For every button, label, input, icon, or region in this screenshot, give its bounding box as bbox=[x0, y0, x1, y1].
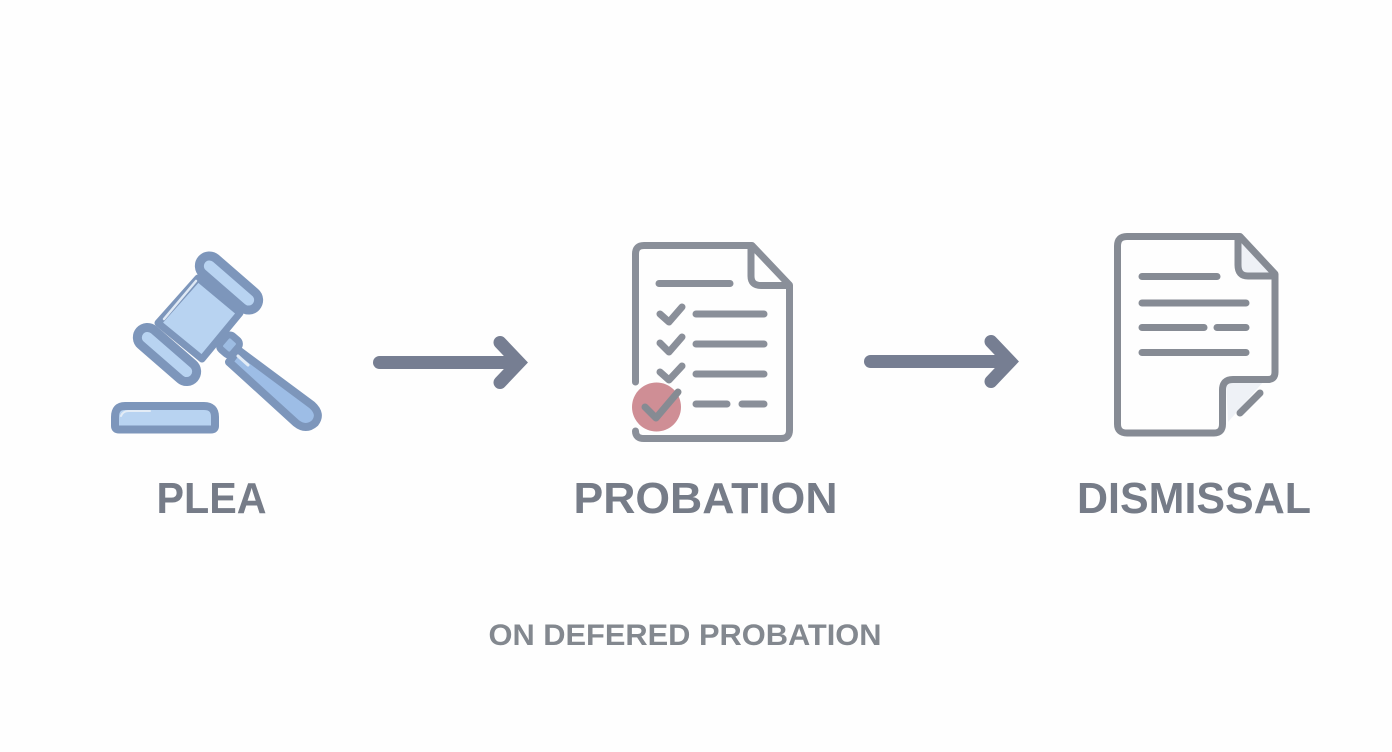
arrow: probation to dismissal bbox=[870, 342, 1010, 382]
seal check bbox=[645, 392, 678, 418]
gavel top cap bbox=[195, 252, 263, 314]
row line 4 bbox=[696, 400, 727, 408]
checklist heading line bbox=[659, 280, 730, 287]
caption: ON DEFERED PROBATION bbox=[488, 619, 882, 652]
gavel handle bbox=[229, 350, 318, 427]
text line 2 bbox=[1142, 300, 1246, 306]
row line 3 bbox=[696, 370, 764, 378]
folded corner bbox=[751, 246, 789, 286]
label: dismissal: DISMISSAL bbox=[1077, 474, 1311, 523]
gavel neck bbox=[218, 333, 241, 357]
gavel bottom cap bbox=[133, 323, 201, 386]
check row 1 bbox=[660, 307, 682, 322]
gavel sound block bbox=[115, 406, 215, 430]
red seal bbox=[632, 382, 681, 432]
gavel head body bbox=[158, 278, 240, 359]
text line 4 bbox=[1142, 349, 1246, 356]
check row 2 bbox=[660, 337, 682, 352]
arrow: plea to probation bbox=[380, 342, 519, 382]
text line 1 bbox=[1142, 273, 1217, 280]
icon: gavel bbox=[115, 252, 318, 430]
row line 1 bbox=[696, 310, 764, 318]
peeled corner shade bbox=[1226, 381, 1264, 422]
icon: probation checklist document bbox=[632, 246, 790, 438]
text line 3 bbox=[1142, 324, 1204, 331]
peel mark bbox=[1240, 393, 1260, 413]
handle highlight bbox=[238, 356, 248, 365]
gavel highlight bbox=[164, 281, 196, 319]
check row 3 bbox=[660, 366, 682, 380]
label: probation: PROBATION bbox=[574, 474, 838, 523]
icon: dismissal document bbox=[1118, 236, 1275, 433]
folded corner bbox=[1238, 238, 1274, 276]
row line 2 bbox=[696, 340, 764, 348]
block highlight bbox=[121, 411, 150, 416]
text line 3 dash bbox=[1217, 324, 1246, 331]
fold shade bbox=[1240, 240, 1273, 275]
document outline bbox=[636, 246, 790, 438]
row line 4 dash bbox=[742, 400, 764, 408]
label: plea: PLEA bbox=[156, 474, 266, 523]
document outline bbox=[1118, 236, 1275, 433]
